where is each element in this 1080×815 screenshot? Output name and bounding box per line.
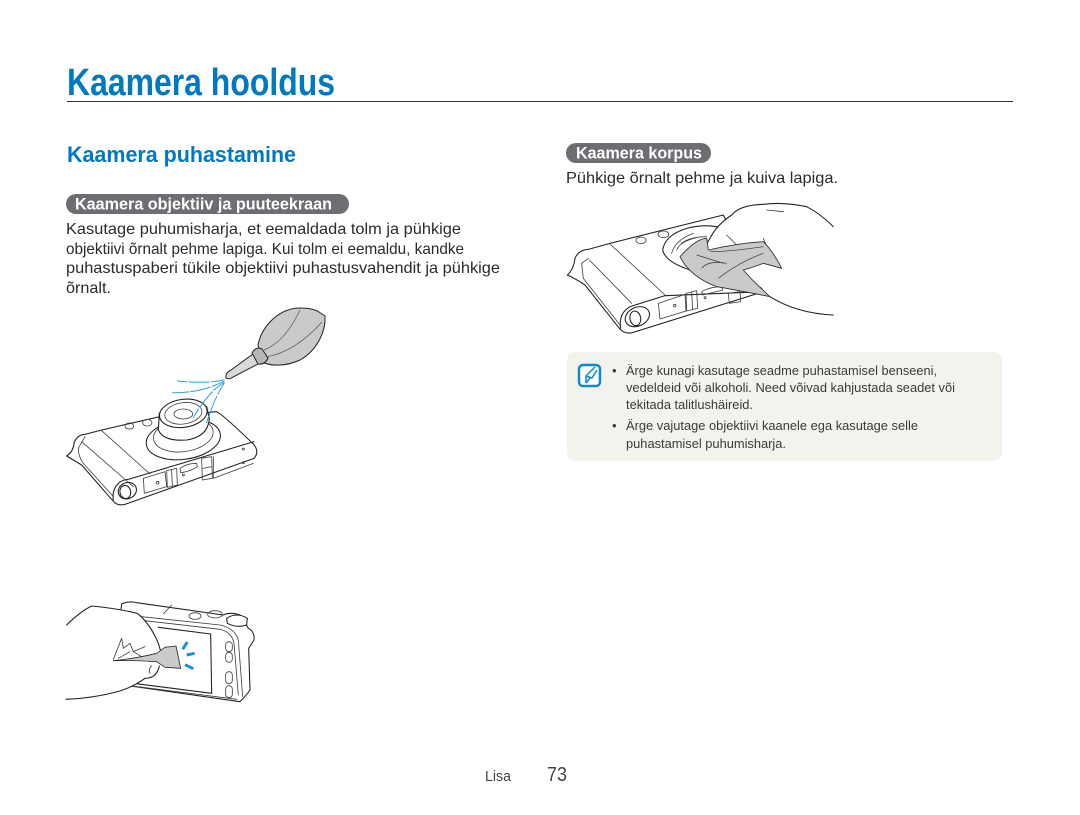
text block: lens cleaning instructions: objektiivi õrnalt pehme lapiga. Kui tolm ei eemaldu, kandke: [66, 241, 464, 258]
subheading pill: camera body: Kaamera korpus: [576, 144, 702, 162]
illustration: cloth wiping camera body: [567, 203, 833, 333]
note text: [612, 363, 955, 451]
page footer: 73: [547, 764, 567, 786]
section heading: Kaamera puhastamine: [67, 142, 296, 167]
subheading pill: lens and touchscreen: Kaamera objektiiv ja puuteekraan: [75, 196, 332, 214]
icon: note pencil: [579, 365, 600, 386]
note text: Ärge kunagi kasutage seadme puhastamisel benseeni,: [626, 363, 937, 378]
title: Kaamera hooldus: [67, 62, 335, 104]
note text: tekitada talitlushäireid.: [626, 397, 753, 412]
note text: •: [612, 363, 617, 378]
text block: lens cleaning instructions: puhastuspaberi tükile objektiivi puhastusvahendit ja pühkige: [66, 260, 500, 277]
note panel: [567, 352, 1002, 460]
text block: lens cleaning instructions: [66, 221, 500, 297]
illustration: hand wiping touchscreen: [66, 602, 254, 702]
page footer: [485, 764, 567, 786]
text block: lens cleaning instructions: õrnalt.: [66, 280, 111, 297]
illustration: camera top with air spray: [67, 380, 257, 505]
note text: •: [612, 418, 617, 433]
text block: lens cleaning instructions: Kasutage puhumisharja, et eemaldada tolm ja pühkige: [66, 221, 461, 238]
text block: body cleaning instruction: Pühkige õrnalt pehme ja kuiva lapiga.: [566, 170, 838, 187]
note text: vedeldeid või alkoholi. Need võivad kahjustada seadet või: [626, 380, 955, 395]
icon: air blower: [226, 308, 325, 379]
note text: Ärge vajutage objektiivi kaanele ega kasutage selle: [626, 418, 918, 433]
page footer: Lisa: [485, 768, 512, 785]
note text: puhastamisel puhumisharja.: [626, 436, 786, 451]
